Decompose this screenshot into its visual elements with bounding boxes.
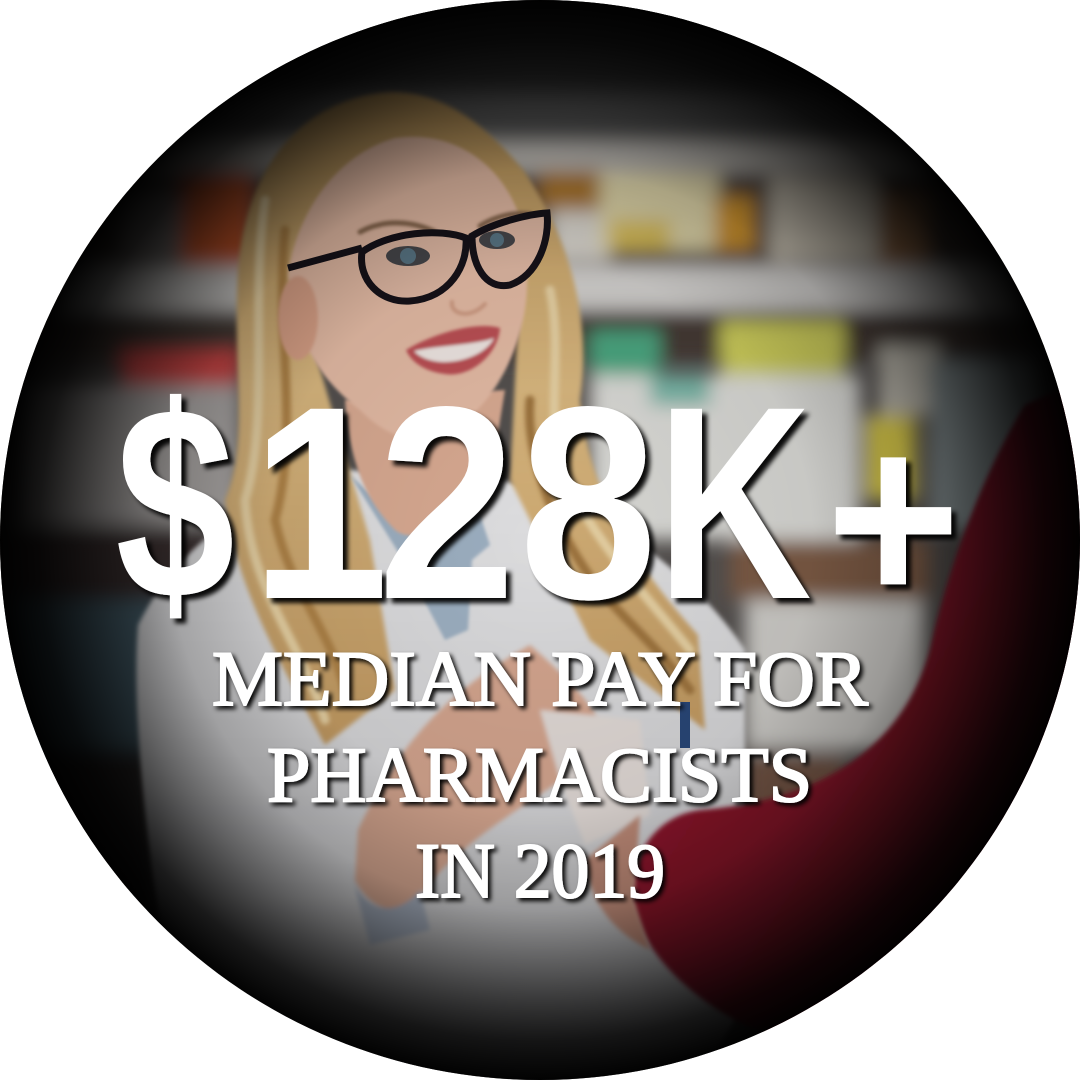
woman: coat — [136, 470, 745, 1080]
headline: $128K+ — [115, 350, 960, 657]
woman: neck — [345, 390, 505, 535]
headline: $128K+: + — [826, 378, 960, 657]
woman: glasses — [288, 213, 547, 301]
headline: $128K+: $ — [115, 350, 235, 657]
woman: smile — [406, 326, 500, 374]
headline: $128K+: K — [657, 350, 812, 657]
woman: hair — [225, 92, 705, 745]
caption: median pay for pharmacists in 2019: MEDIAN PAY FOR — [212, 635, 868, 722]
customer: hand — [585, 815, 650, 950]
woman: hair strands — [245, 200, 690, 720]
woman: face — [278, 137, 528, 439]
woman: eyebrows and nose — [360, 214, 530, 314]
badge: coat pocket tag — [680, 702, 690, 748]
woman: blouse collar — [350, 475, 490, 640]
caption: median pay for pharmacists in 2019 — [212, 635, 868, 914]
customer: red sleeve — [632, 380, 1080, 1080]
caption: median pay for pharmacists in 2019: IN 2019 — [415, 827, 665, 914]
woman: forearm and hands — [348, 645, 650, 945]
caption: median pay for pharmacists in 2019: PHARMACISTS — [267, 731, 812, 818]
headline: $128K+: 128 — [251, 350, 657, 657]
